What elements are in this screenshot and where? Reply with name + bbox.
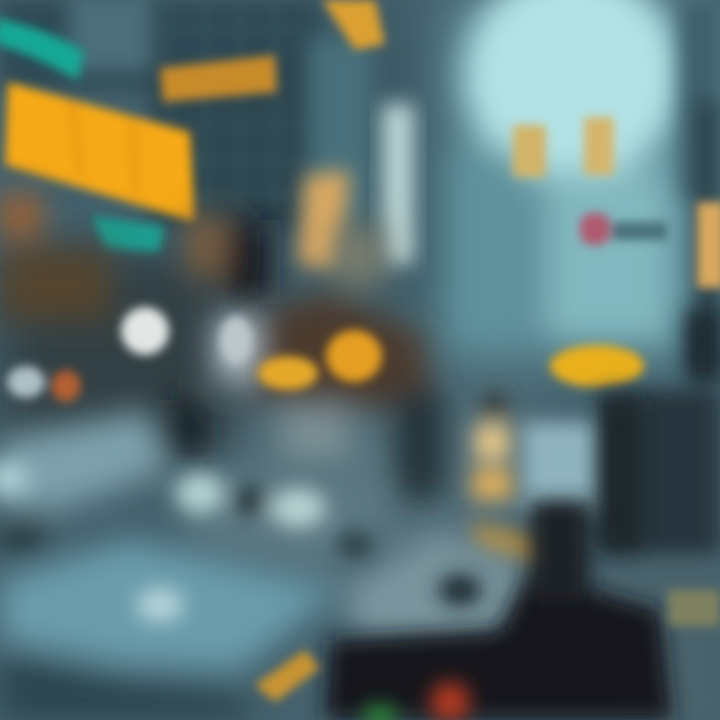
icon: teal awnings [0, 18, 165, 252]
building window grid [150, 0, 310, 210]
panel: right dark figures [512, 298, 720, 564]
icon: large orange sign [5, 82, 195, 222]
icon: white globe and small lamps [7, 307, 252, 402]
panel: foreground dark silhouette [325, 400, 672, 720]
storefront warm glow [0, 195, 270, 320]
icon: white column [382, 104, 414, 264]
desk highlights [0, 460, 482, 622]
icon: glowing figure [472, 391, 550, 566]
icon: yellow lamp [550, 345, 644, 387]
icon: green and red indicator lights [363, 682, 470, 720]
panel: sky and distant towers [0, 0, 720, 560]
icon: upper signs [160, 0, 385, 102]
sky glow [455, 0, 680, 340]
icon: traffic lights [513, 117, 720, 288]
icon: peach tower sign [298, 170, 350, 270]
icon: yellow foreground accents [255, 590, 720, 702]
panel: central figure cluster [170, 225, 445, 500]
icon: central orange lights [258, 330, 382, 390]
panel: dark building top left [0, 0, 720, 380]
panel: desk and machinery [0, 410, 530, 720]
